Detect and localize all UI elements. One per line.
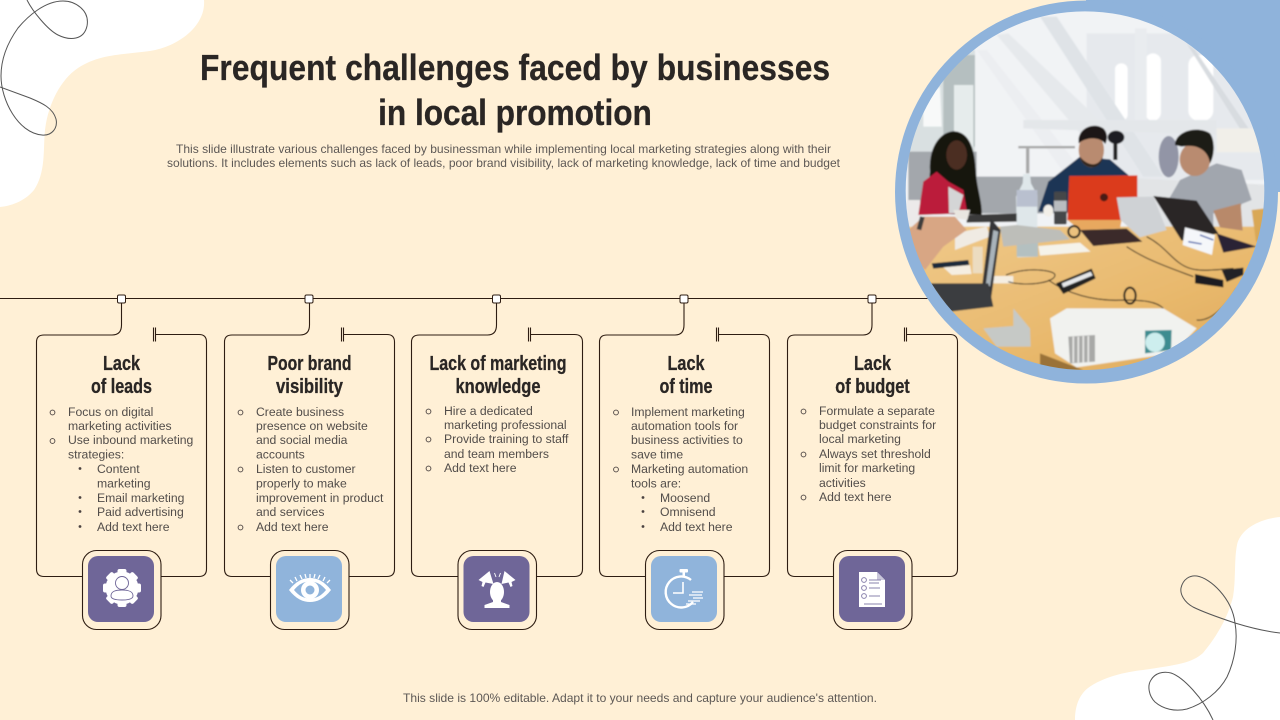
cables and devices <box>1006 237 1237 320</box>
card: lack of budget <box>788 295 958 630</box>
bullet list: Formulate a separate <box>819 404 935 418</box>
timeline node <box>118 295 126 303</box>
bullet list: strategies: <box>68 448 124 462</box>
bullet list <box>614 405 748 534</box>
card: lack of leads <box>36 295 206 630</box>
icon tile: checklist document <box>834 550 912 630</box>
bullet list <box>426 404 569 475</box>
bullet list: Provide training to staff <box>444 432 569 446</box>
heading <box>835 353 910 398</box>
tablet and black laptop <box>1117 197 1167 237</box>
bullet list: marketing <box>97 476 151 490</box>
heading <box>268 353 352 398</box>
card outline <box>224 299 394 576</box>
title: Frequent challenges faced by businesses <box>200 48 830 88</box>
bullet list: and team members <box>444 447 549 461</box>
heading: Lack <box>854 353 892 375</box>
heading <box>91 353 152 398</box>
bullet list <box>801 404 936 504</box>
bullet list: Listen to customer <box>256 462 356 476</box>
bullet list: Content <box>97 462 140 476</box>
heading: knowledge <box>456 376 540 398</box>
left hand and cards <box>955 227 990 250</box>
blue ring <box>895 0 1278 384</box>
bullet list: Paid advertising <box>97 505 184 519</box>
bullet list: tools are: <box>631 476 681 490</box>
card: lack of time <box>600 295 770 630</box>
heading <box>430 353 566 398</box>
subtitle: This slide illustrate various challenges faced by businessman while implementing local marketing strategies along with their <box>176 142 831 156</box>
bullet list: save time <box>631 448 683 462</box>
heading <box>660 353 712 398</box>
heading: of budget <box>835 376 910 398</box>
bullet list: local marketing <box>819 432 901 446</box>
decorative squiggle: bottom right <box>1149 576 1280 720</box>
card outline <box>412 299 582 576</box>
bullet list: Moosend <box>660 491 710 505</box>
bullet list: properly to make <box>256 476 347 490</box>
man in navy shirt <box>1038 157 1137 213</box>
man in grey shirt <box>1168 163 1252 230</box>
table <box>900 227 1273 373</box>
woman <box>927 131 982 215</box>
bullet list: Add text here <box>660 520 733 534</box>
meeting photo <box>900 7 1273 373</box>
bullet list: Always set threshold <box>819 447 931 461</box>
bullet list: Add text here <box>97 520 170 534</box>
bullet list: business activities to <box>631 433 743 447</box>
bullet list: marketing activities <box>68 419 172 433</box>
bullet list: Email marketing <box>97 491 184 505</box>
timeline node <box>305 295 313 303</box>
timeline node <box>680 295 688 303</box>
bullet list: Add text here <box>256 520 329 534</box>
bullet list: budget constraints for <box>819 418 936 432</box>
bullet list: activities <box>819 476 866 490</box>
bullet list: Add text here <box>819 490 892 504</box>
icon tile: gear with person <box>82 550 161 630</box>
projector <box>1050 308 1197 367</box>
bullet list: automation tools for <box>631 419 738 433</box>
heading: of leads <box>91 376 152 398</box>
thermos <box>1054 192 1067 224</box>
name card <box>1183 227 1215 255</box>
bottle <box>1016 174 1037 257</box>
bullet list: Omnisend <box>660 505 716 519</box>
title <box>200 48 830 133</box>
subtitle <box>167 142 841 170</box>
bullet list: and social media <box>256 433 348 447</box>
heading: Poor brand <box>268 353 352 375</box>
icon tile: person with megaphones <box>458 550 536 630</box>
bullet list: improvement in product <box>256 491 384 505</box>
heading: Lack <box>668 353 705 375</box>
table laptops and papers <box>1000 225 1070 247</box>
decorative blob: bottom right <box>1075 517 1280 720</box>
timeline node <box>868 295 876 303</box>
bullet list: Use inbound marketing <box>68 433 193 447</box>
subtitle: solutions. It includes elements such as lack of leads, poor brand visibility, lack of marketing knowledge, lack of time and budget <box>167 156 841 170</box>
card: lack of marketing knowledge <box>412 295 582 630</box>
bullet list: limit for marketing <box>819 461 915 475</box>
red laptop <box>1067 175 1137 220</box>
footer note: This slide is 100% editable. Adapt it to your needs and capture your audience's attention. <box>403 691 877 705</box>
bullet list: and services <box>256 505 324 519</box>
bullet list: Marketing automation <box>631 462 748 476</box>
timeline node <box>492 295 500 303</box>
card outline <box>788 299 958 576</box>
heading: Lack of marketing <box>430 353 566 375</box>
bullet list: Add text here <box>444 461 517 475</box>
stand on table <box>983 308 1031 347</box>
bullet list <box>50 405 193 534</box>
card: poor brand visibility <box>224 295 394 630</box>
icon tile: stopwatch <box>646 550 724 630</box>
heading: visibility <box>276 376 344 398</box>
icon tile: eye <box>270 550 349 630</box>
decorative blob: top left <box>0 0 204 207</box>
bullet list: marketing professional <box>444 418 567 432</box>
bullet list: presence on website <box>256 419 368 433</box>
bullet list: accounts <box>256 448 305 462</box>
card outline <box>600 299 770 576</box>
title: in local promotion <box>378 93 652 133</box>
bullet list <box>238 405 384 534</box>
photo panel <box>895 0 1280 384</box>
bullet list: Create business <box>256 405 344 419</box>
heading: Lack <box>103 353 141 375</box>
bullet list: Focus on digital <box>68 405 153 419</box>
heading: of time <box>660 376 712 398</box>
bullet list: Hire a dedicated <box>444 404 533 418</box>
card outline <box>36 299 206 576</box>
decorative squiggle: top left <box>0 0 87 135</box>
connector timeline <box>0 298 935 300</box>
bullet list: Implement marketing <box>631 405 745 419</box>
blue corner <box>1086 0 1280 192</box>
foreground laptop <box>982 218 1001 302</box>
